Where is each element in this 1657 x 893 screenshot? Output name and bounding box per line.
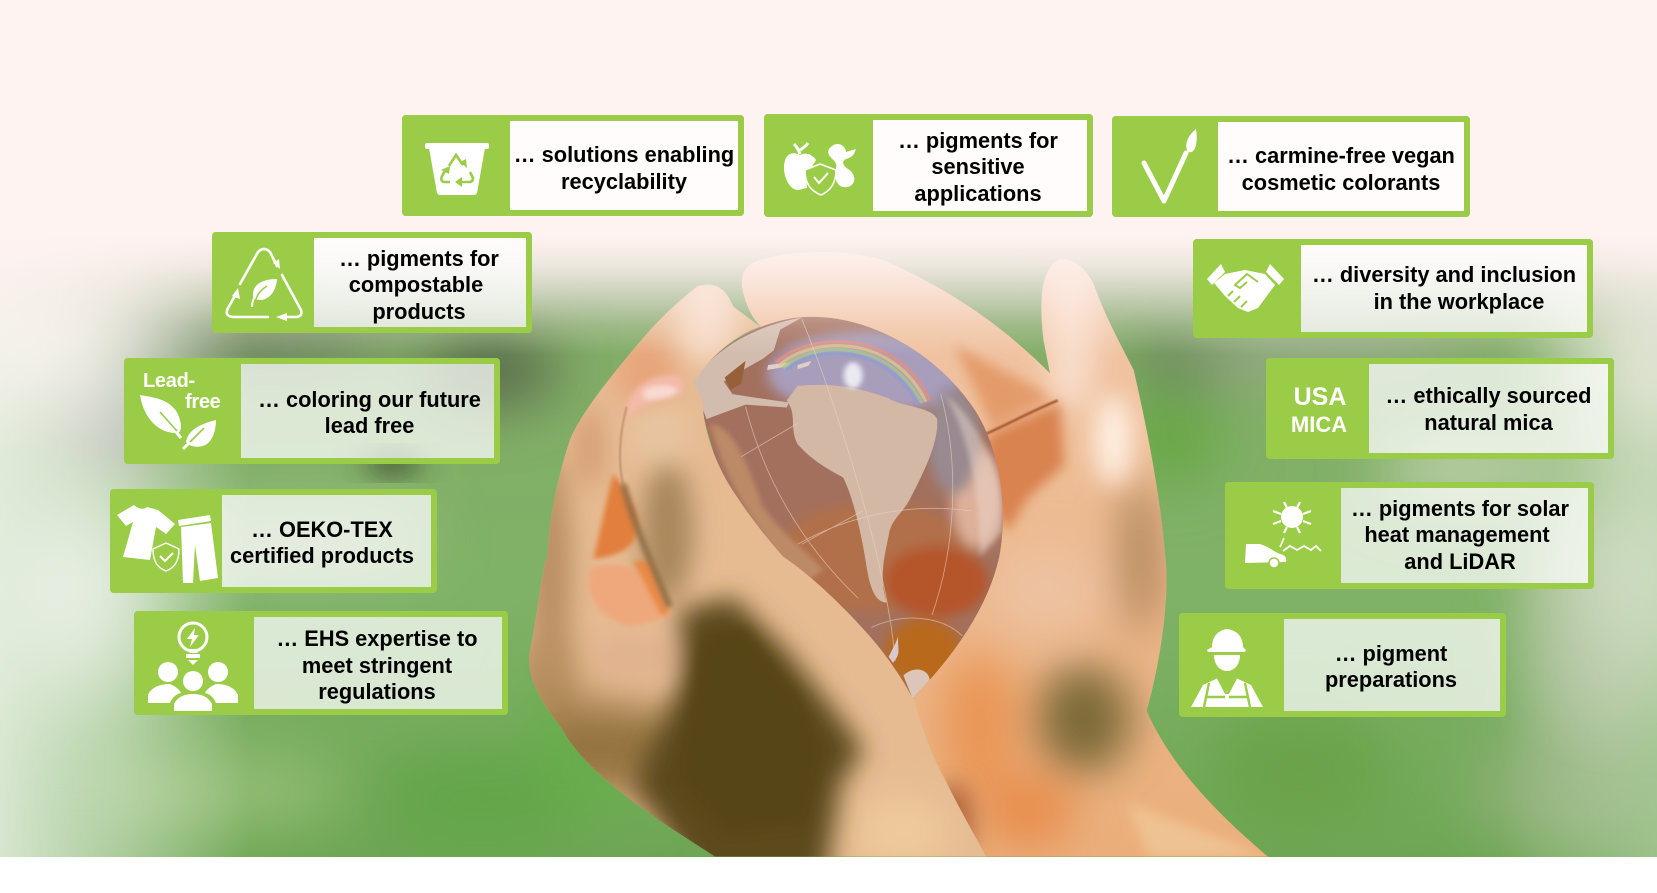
text: recyclability xyxy=(561,168,687,194)
text: … diversity and inclusion xyxy=(1312,262,1576,287)
icon: lead-free leaves: free xyxy=(185,391,221,413)
icon: recycling bin xyxy=(425,143,489,195)
text: regulations xyxy=(318,679,436,704)
panel: pigment preparations xyxy=(1179,613,1506,717)
text: … pigment xyxy=(1335,640,1447,666)
panel: solar heat management xyxy=(1225,482,1594,589)
text: heat management xyxy=(1364,522,1550,547)
text: … coloring our future xyxy=(258,386,481,412)
text xyxy=(1218,122,1464,211)
text: … carmine-free vegan xyxy=(1227,143,1455,168)
text xyxy=(1341,488,1588,583)
text: lead free xyxy=(325,413,414,438)
text: products xyxy=(372,299,466,324)
text xyxy=(314,238,526,327)
text: … ethically sourced xyxy=(1386,383,1591,408)
text: in the workplace xyxy=(1374,288,1544,314)
text xyxy=(510,121,738,210)
icon: sun, car and heat wave xyxy=(1245,502,1322,568)
panel: lead free xyxy=(124,358,500,464)
text xyxy=(241,364,494,458)
icon: apple, duck and shield xyxy=(784,142,856,196)
icon: worker with hard hat xyxy=(1191,629,1263,707)
icon: compost triangle with leaf xyxy=(226,248,303,321)
panel: vegan cosmetic colorants xyxy=(1112,116,1470,217)
panel: diversity and inclusion xyxy=(1193,239,1593,338)
text: … solutions enabling xyxy=(514,142,734,167)
hands holding a glass globe xyxy=(529,252,1268,857)
text xyxy=(873,120,1087,211)
text: meet stringent xyxy=(302,653,452,678)
glass globe xyxy=(694,316,1003,698)
text xyxy=(1301,245,1587,332)
icon: lead-free leaves xyxy=(140,370,221,450)
text xyxy=(222,495,431,587)
icon: light bulb over team xyxy=(148,622,238,711)
text: certified products xyxy=(230,543,414,568)
left hand xyxy=(529,284,986,857)
text: … pigments for xyxy=(898,128,1058,153)
top fade into pale background xyxy=(0,0,1657,236)
icon: USA MICA label: MICA xyxy=(1291,412,1347,437)
text xyxy=(1369,364,1608,453)
panel: ethically sourced mica xyxy=(1266,358,1614,459)
icon: lead-free leaves: Lead- xyxy=(143,370,195,392)
panel: OEKO-TEX xyxy=(110,489,437,593)
icon: handshake xyxy=(1207,264,1284,312)
panel: EHS expertise xyxy=(134,611,508,715)
text: … OEKO-TEX xyxy=(251,516,393,542)
text: compostable xyxy=(349,272,483,297)
rainbow xyxy=(776,342,930,404)
text: cosmetic colorants xyxy=(1242,170,1440,194)
panel: compostable products xyxy=(212,232,532,333)
text: applications xyxy=(914,181,1042,206)
icon: USA MICA label: USA xyxy=(1294,383,1346,411)
text: … pigments for xyxy=(339,246,499,271)
text: and LiDAR xyxy=(1404,549,1516,574)
text: … pigments for solar xyxy=(1351,496,1569,521)
finger seen through glass xyxy=(710,423,824,586)
continents xyxy=(693,318,802,419)
text: sensitive xyxy=(931,154,1025,179)
text: natural mica xyxy=(1424,410,1553,434)
panel: recyclability xyxy=(402,115,744,216)
panel: sensitive applications xyxy=(764,114,1093,217)
text xyxy=(254,617,502,709)
text xyxy=(1284,619,1500,711)
text: preparations xyxy=(1325,667,1457,692)
text: … EHS expertise to xyxy=(276,626,478,651)
icon: V with paint brush xyxy=(1142,129,1197,204)
icon: USA MICA label xyxy=(1291,383,1347,437)
icon: shirt, trousers and shield xyxy=(117,505,218,583)
globe grid lines xyxy=(741,319,971,661)
right hand xyxy=(742,252,1268,857)
